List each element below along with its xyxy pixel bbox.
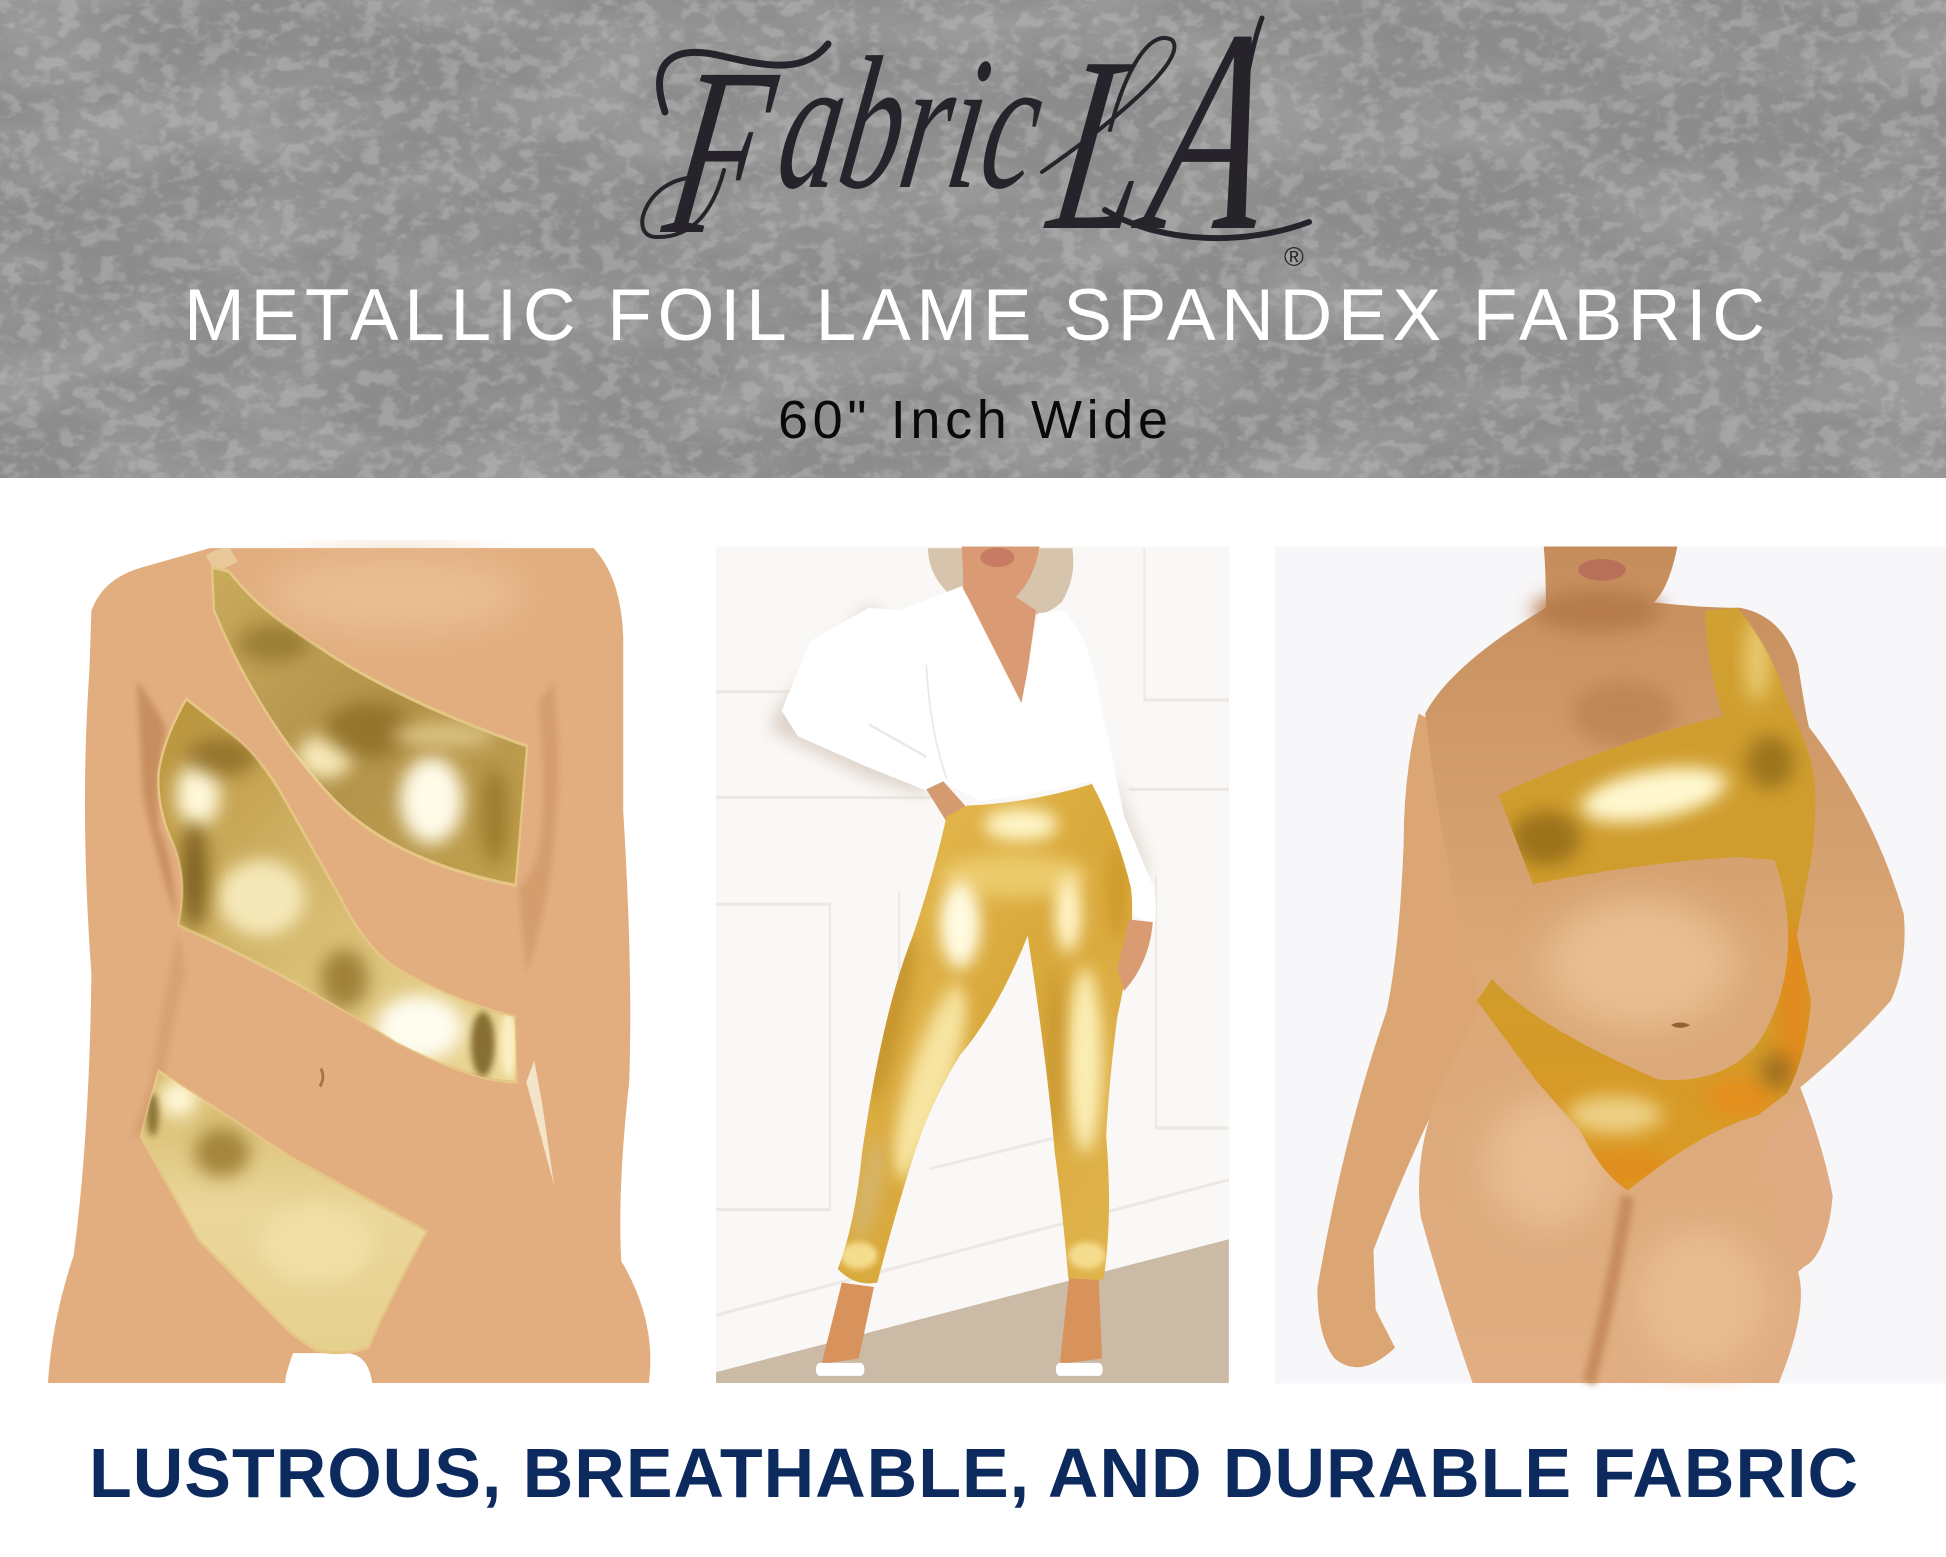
middle panel foil shading — [176, 738, 516, 1077]
logo: FabricLA: L — [1034, 5, 1170, 282]
hand on hip — [926, 781, 965, 822]
sandals — [820, 1357, 1099, 1381]
right hand — [1117, 919, 1153, 991]
logo: FabricLA — [642, 0, 1309, 292]
foil highlights and shadows — [1511, 616, 1811, 1185]
header banner: grey marble texture — [0, 0, 1946, 478]
ankles and feet — [822, 1278, 1102, 1364]
left arm — [1317, 713, 1511, 1367]
navel — [320, 1069, 323, 1086]
title: METALLIC FOIL LAME SPANDEX FABRIC — [184, 275, 1765, 356]
floor — [716, 1239, 1229, 1383]
hand on thigh — [1755, 1104, 1833, 1264]
skin shading — [1486, 589, 1766, 1383]
subtitle: width: 60" Inch Wide — [778, 390, 1168, 450]
photo 2: gold metallic leggings and white blouse — [716, 546, 1229, 1384]
logo: FabricLA: F — [651, 18, 790, 284]
lower panel foil shading — [147, 1079, 372, 1283]
upper panel foil shading — [238, 624, 509, 865]
gold panels — [141, 567, 527, 1353]
photo 1: gold one-shoulder mesh swimsuit — [48, 540, 650, 1383]
hair — [928, 548, 1073, 614]
footer tagline: LUSTROUS, BREATHABLE, AND DURABLE FABRIC — [89, 1434, 1858, 1512]
swimsuit body — [1477, 608, 1815, 1191]
registered mark: ® — [1284, 242, 1304, 272]
blouse — [782, 586, 1156, 926]
leggings — [838, 784, 1132, 1284]
leggings highlights — [840, 808, 1125, 1269]
logo: FabricLA: abric — [767, 18, 1057, 228]
photo 3: gold cut-out one-piece swimsuit — [1276, 546, 1946, 1390]
wall shadow — [769, 605, 926, 795]
torso and legs — [1419, 547, 1905, 1383]
face and neck — [962, 547, 1040, 705]
